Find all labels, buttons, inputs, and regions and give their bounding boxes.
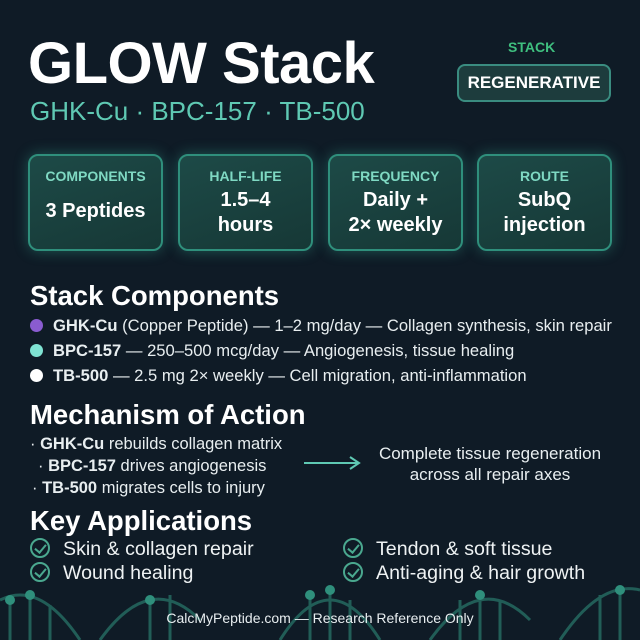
component rows (30, 316, 612, 385)
arrow (304, 456, 361, 470)
row: TB-500: TB-500 — 2.5 mg 2× weekly — Cell migration, anti-inflammation (53, 366, 527, 385)
heading: key applications: Key Applications (30, 505, 252, 536)
applications list: Wound healing (63, 562, 193, 584)
card: route: ROUTE (520, 168, 569, 184)
outcome text: Complete tissue regeneration (379, 444, 601, 463)
card: components: 3 Peptides (45, 200, 146, 222)
card: half-life (178, 154, 313, 251)
applications list: Anti-aging & hair growth (376, 562, 585, 584)
card: route: injection (503, 214, 586, 236)
mechanism list (30, 435, 282, 497)
card: route: SubQ (518, 189, 571, 211)
heading: stack components: Stack Components (30, 280, 279, 311)
card: route (477, 154, 612, 251)
card: half-life: 1.5–4 (220, 189, 271, 211)
mechanism list: · TB-500 migrates cells to injury (32, 479, 265, 497)
outcome text (379, 444, 601, 484)
card: frequency: 2× weekly (349, 214, 442, 236)
card: components (28, 154, 163, 251)
card: frequency: FREQUENCY (352, 168, 439, 184)
row: GHK-Cu: GHK-Cu (Copper Peptide) — 1–2 mg/day — Collagen synthesis, skin repair (53, 316, 612, 335)
title: GLOW Stack (28, 31, 374, 96)
applications list: Skin & collagen repair (63, 538, 254, 560)
applications list (30, 538, 585, 584)
card: components: COMPONENTS (45, 168, 146, 184)
subtitle: GHK-Cu · BPC-157 · TB-500 (30, 96, 365, 126)
badge: regenerative: REGENERATIVE (468, 73, 600, 92)
mechanism list: · BPC-157 drives angiogenesis (38, 457, 266, 475)
mechanism list: · GHK-Cu rebuilds collagen matrix (30, 435, 282, 453)
applications list: Tendon & soft tissue (376, 538, 552, 560)
footer: CalcMyPeptide.com — Research Reference Only (166, 610, 474, 626)
badge: regenerative (457, 64, 611, 102)
card: frequency (328, 154, 463, 251)
card: frequency: Daily + (363, 189, 428, 211)
heading: mechanism: Mechanism of Action (30, 399, 306, 430)
card: half-life: HALF-LIFE (209, 168, 282, 184)
card: half-life: hours (218, 214, 273, 236)
stack label: STACK (508, 39, 555, 55)
outcome text: across all repair axes (410, 465, 570, 484)
background: DNA decoration (0, 585, 640, 640)
row: BPC-157: BPC-157 — 250–500 mcg/day — Angiogenesis, tissue healing (53, 341, 514, 360)
